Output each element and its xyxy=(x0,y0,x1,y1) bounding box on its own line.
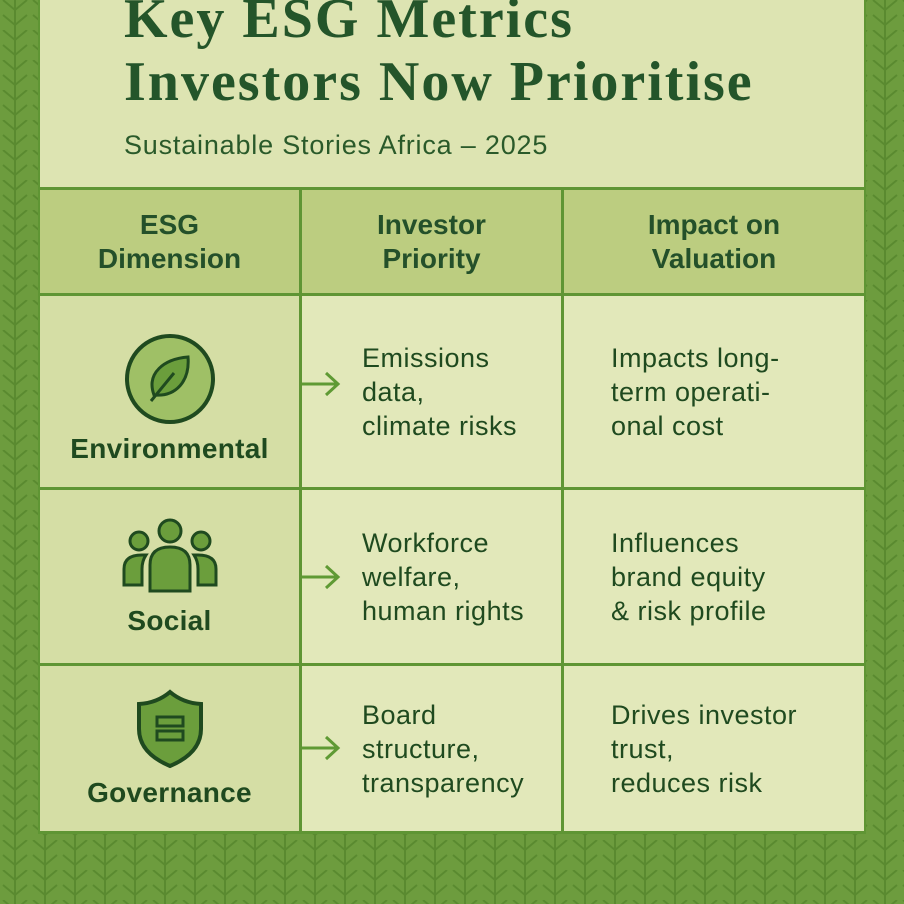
header: ESG Dimension xyxy=(40,190,299,293)
text: governance priority xyxy=(302,666,561,831)
header: Investor Priority: Priority xyxy=(382,242,481,274)
header: ESG Dimension: Dimension xyxy=(98,242,241,274)
header: Impact on Valuation: Valuation xyxy=(652,242,776,274)
row: Governance xyxy=(40,666,299,831)
title xyxy=(124,0,754,113)
text: environmental priority xyxy=(302,296,561,487)
text: environmental priority: climate risks xyxy=(362,410,517,440)
text: social priority: welfare, xyxy=(362,562,461,592)
arrow: governance xyxy=(302,736,340,760)
text: social priority: human rights xyxy=(362,596,524,626)
header: Impact on Valuation xyxy=(564,190,864,293)
icon: leaf xyxy=(125,334,215,424)
text: environmental priority: data, xyxy=(362,376,425,406)
text: social impact: brand equity xyxy=(611,562,766,592)
text: governance impact xyxy=(564,666,864,831)
text: environmental impact xyxy=(564,296,864,487)
subtitle: Sustainable Stories Africa – 2025 xyxy=(124,130,548,160)
title: Investors Now Prioritise xyxy=(124,51,754,113)
text: governance priority: transparency xyxy=(362,768,524,798)
text: social impact xyxy=(564,490,864,663)
text: environmental priority: Emissions xyxy=(362,342,490,372)
text: social impact: Influences xyxy=(611,528,739,558)
text: governance impact: trust, xyxy=(611,734,674,764)
text: environmental impact: onal cost xyxy=(611,410,724,440)
header: Investor Priority: Investor xyxy=(377,208,486,240)
text: governance priority: structure, xyxy=(362,734,480,764)
text: governance impact: reduces risk xyxy=(611,768,763,798)
icon: people xyxy=(122,518,218,592)
header: ESG Dimension: ESG xyxy=(140,208,199,240)
row: Social: Social xyxy=(127,604,212,636)
row: Environmental: Environmental xyxy=(70,432,269,464)
arrow: social xyxy=(302,565,340,589)
text: governance impact: Drives investor xyxy=(611,700,797,730)
row: Environmental xyxy=(40,296,299,487)
icon: shield xyxy=(137,690,203,768)
title block xyxy=(40,0,864,187)
row: Social xyxy=(40,490,299,663)
text: social impact: & risk profile xyxy=(611,596,767,626)
text: environmental impact: Impacts long- xyxy=(611,342,780,372)
text: environmental impact: term operati- xyxy=(611,376,771,406)
text: governance priority: Board xyxy=(362,700,437,730)
text: social priority: Workforce xyxy=(362,528,489,558)
row: Governance: Governance xyxy=(87,776,252,808)
arrow: environmental xyxy=(302,372,340,396)
header: Investor Priority xyxy=(302,190,561,293)
header: Impact on Valuation: Impact on xyxy=(648,208,780,240)
text: social priority xyxy=(302,490,561,663)
